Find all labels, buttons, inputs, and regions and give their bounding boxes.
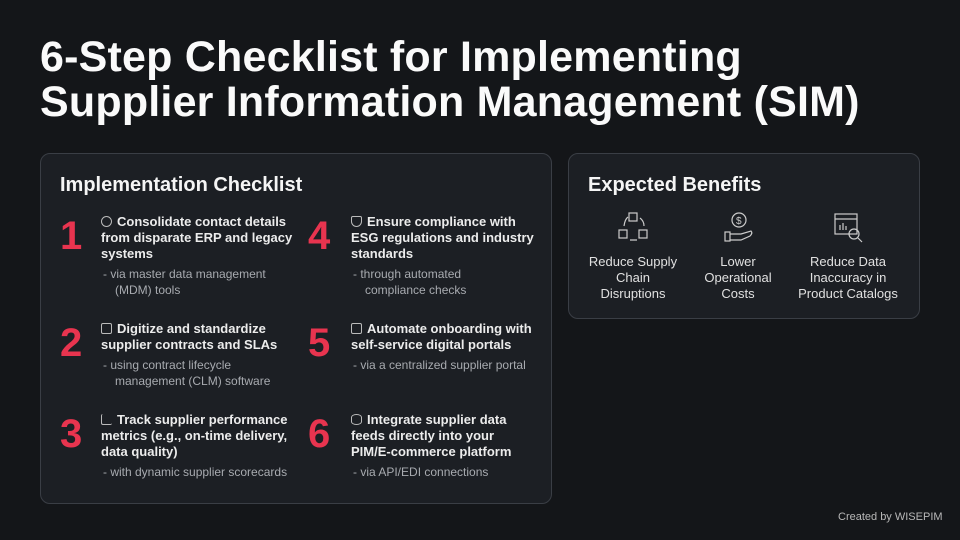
title: Supplier Information Management (SIM) [40,78,860,126]
step 5: 5 [308,321,330,365]
step 3: - with dynamic supplier scorecards [103,465,287,479]
step 5: Automate onboarding with self-service digital portals [351,321,532,352]
icon: cubes cycle [618,212,648,241]
heading: expected benefits: Expected Benefits [588,174,761,196]
icon: hand with coin [724,212,752,242]
title: 6-Step Checklist for Implementing [40,33,742,81]
icon: hand with coin: $ [736,216,742,227]
step 1: - via master data management (MDM) tools [103,267,266,297]
benefit 1: Reduce Supply Chain Disruptions [589,254,677,301]
step 4: Ensure compliance with ESG regulations and industry standards [351,214,534,261]
step 2: - using contract lifecycle management (CLM) software [103,358,270,388]
step 1: Consolidate contact details from disparate ERP and legacy systems [101,214,292,261]
step 6: Integrate supplier data feeds directly into your PIM/E-commerce platform [351,412,511,459]
step 5 [308,321,532,372]
benefit 2 [704,212,772,301]
step 3: 3 [60,412,82,456]
footer credit: Created by WISEPIM [838,511,943,523]
panel: expected benefits [568,153,920,319]
step 2: Digitize and standardize supplier contracts and SLAs [101,321,277,352]
step 2: 2 [60,321,82,365]
step 4: 4 [308,214,330,258]
step 6: - via API/EDI connections [353,465,488,479]
step 2 [60,321,277,388]
title [40,33,860,126]
step 6: 6 [308,412,330,456]
step 1 [60,214,292,297]
step 4: - through automated compliance checks [353,267,466,297]
step 4 [308,214,534,297]
step 3: Track supplier performance metrics (e.g., on-time delivery, data quality) [101,412,288,459]
heading: implementation checklist: Implementation Checklist [60,174,302,196]
panel: implementation checklist [40,153,552,504]
benefit 2: Lower Operational Costs [704,254,772,301]
benefit 3 [798,213,898,301]
benefit 1 [589,212,678,301]
benefit 3: Reduce Data Inaccuracy in Product Catalogs [798,254,898,301]
step 1: 1 [60,214,82,258]
icon: data magnifier [834,213,862,242]
step 6 [308,412,511,479]
step 5: - via a centralized supplier portal [353,358,526,372]
step 3 [60,412,288,479]
